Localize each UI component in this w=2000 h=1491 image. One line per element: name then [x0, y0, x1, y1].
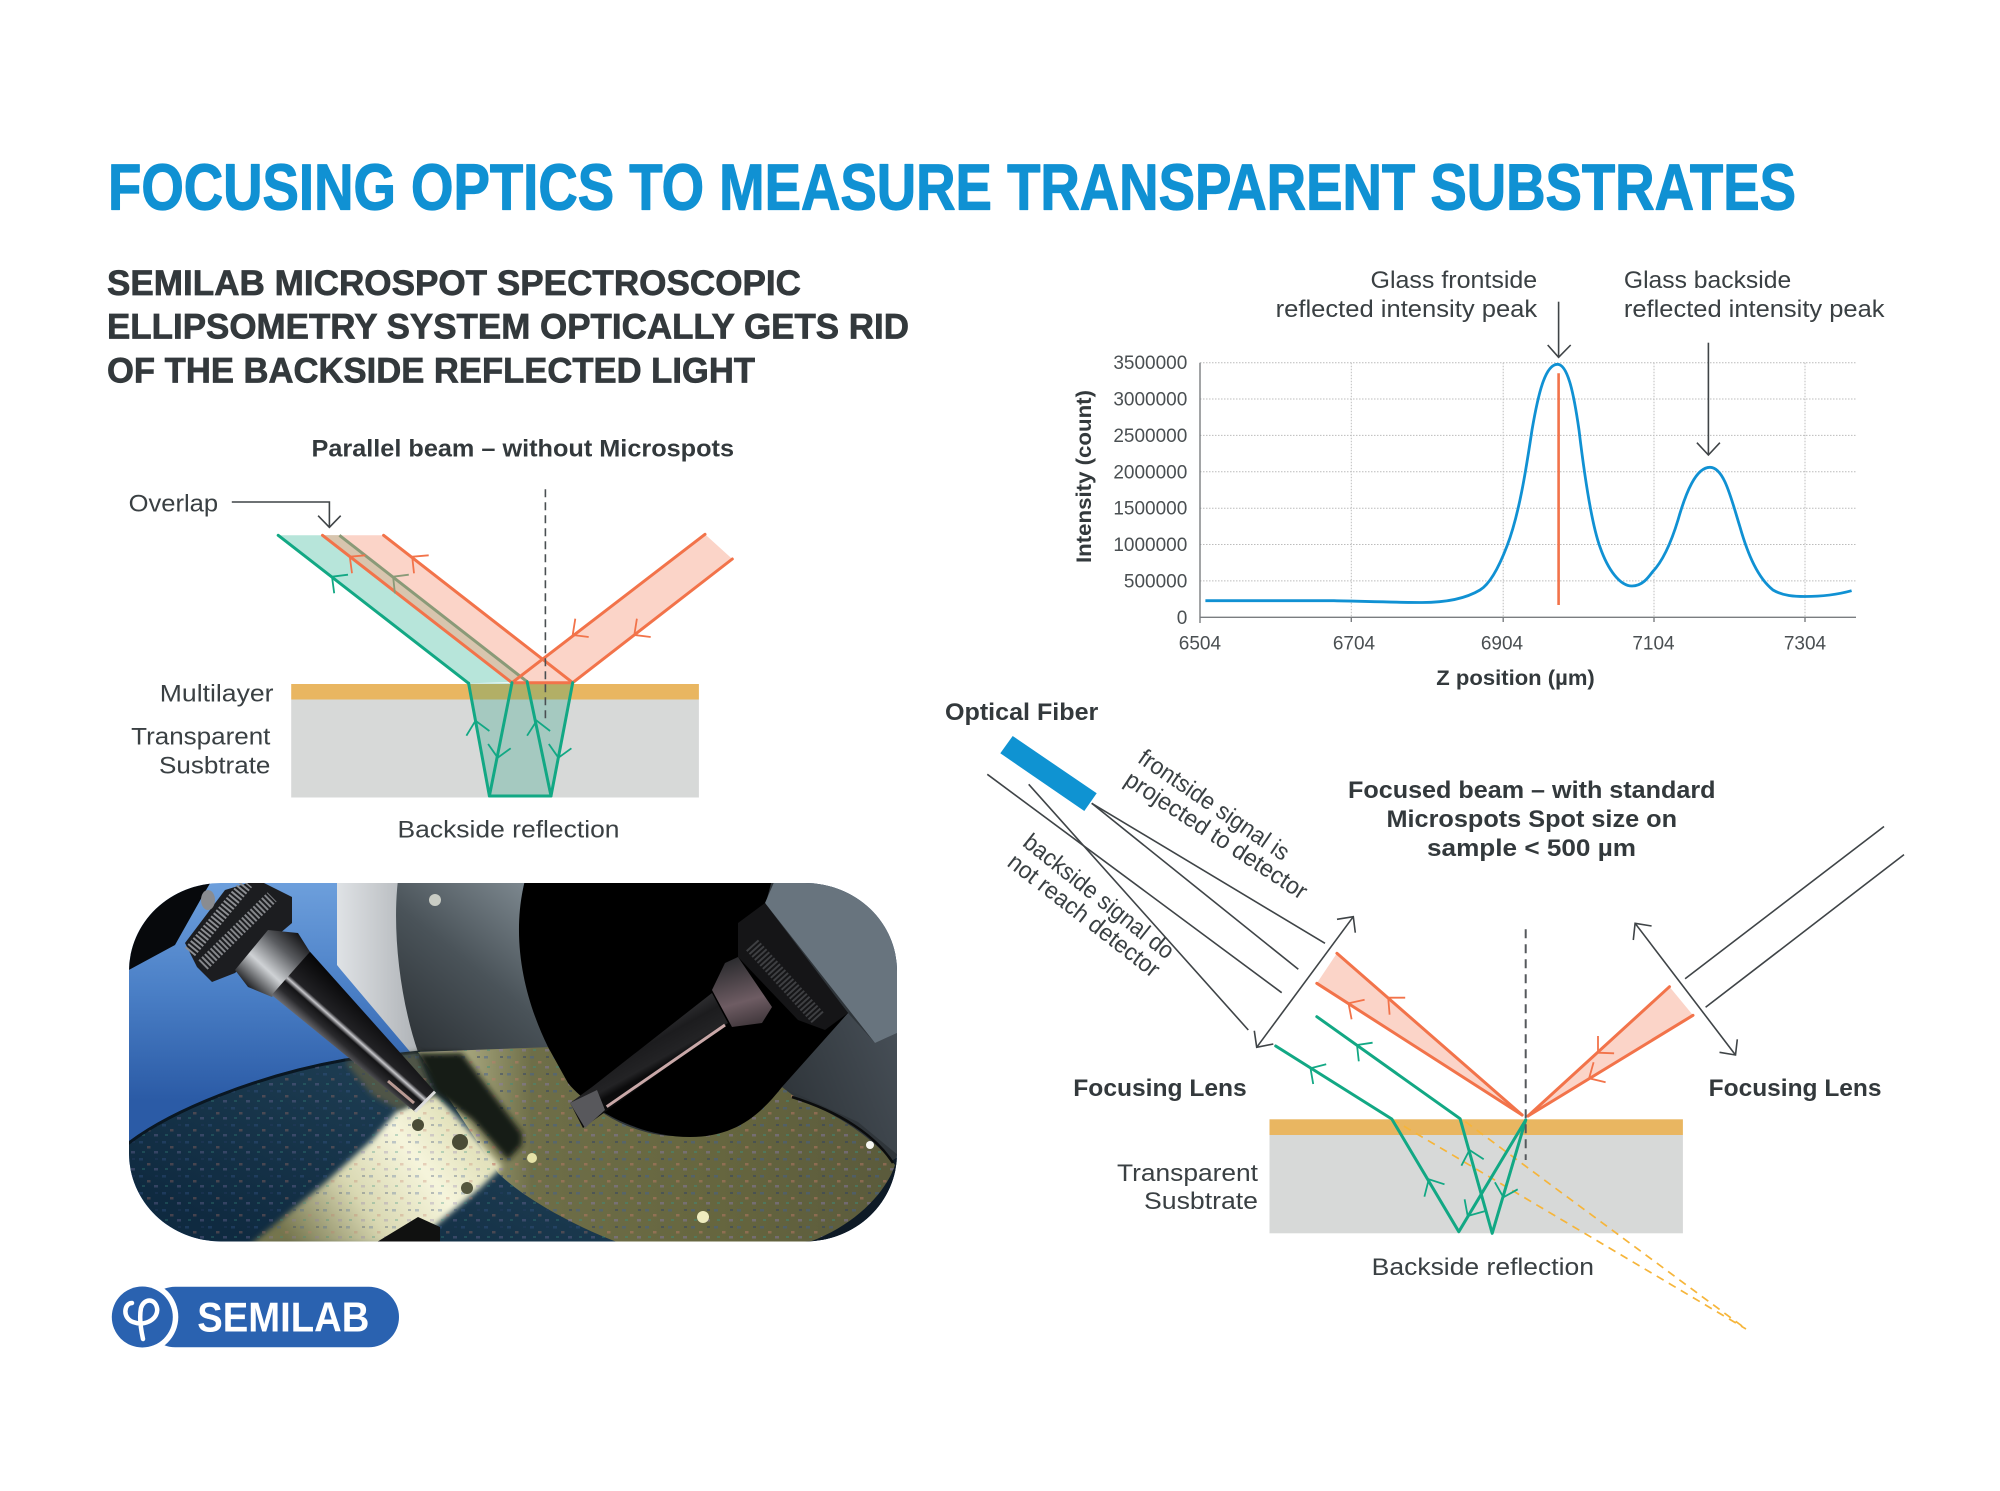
reflected green beam [278, 535, 527, 683]
x axis tick labels: 7104 [1632, 633, 1675, 654]
focused beam heading: Focused beam – with standard [1348, 777, 1716, 804]
substrate labels: Susbtrate [1144, 1188, 1258, 1215]
focusing lens labels [1073, 1075, 1882, 1102]
substrate labels: Transparent [1117, 1160, 1258, 1187]
y axis title: Intensity (count) [1073, 390, 1096, 563]
y axis tick labels: 2000000 [1113, 462, 1187, 483]
layer labels: Transparent [131, 723, 271, 750]
incoming parallel rays [1685, 826, 1904, 1007]
axes [1200, 363, 1856, 623]
incident beam [512, 534, 732, 683]
normal axis dashed line [544, 489, 546, 718]
beam edge lines [278, 534, 732, 796]
direction arrowheads [332, 555, 651, 758]
backside reflection label: Backside reflection [1372, 1254, 1594, 1281]
subtitle: SEMILAB MICROSPOT SPECTROSCOPIC [107, 264, 801, 303]
frontside signal note: projected to detector [1120, 766, 1312, 905]
x axis title: Z position (µm) [1436, 667, 1595, 690]
logo: Semilab [106, 1281, 399, 1353]
frontside signal note: frontside signal is [1133, 744, 1294, 866]
subtitle: OF THE BACKSIDE REFLECTED LIGHT [107, 352, 755, 390]
detector ray lines [987, 774, 1325, 1030]
frontside annotation: reflected intensity peak [1276, 296, 1538, 323]
focused beam heading: Microspots Spot size on [1386, 806, 1677, 833]
y axis tick labels [1113, 353, 1187, 629]
overlap label with leader arrow: Overlap [129, 491, 218, 518]
chart: intensity versus Z position [1073, 267, 1886, 690]
optical fiber label: Optical Fiber [945, 699, 1098, 726]
overlap band [322, 535, 527, 683]
frontside annotation [1276, 267, 1571, 357]
reflected focused beam [1317, 953, 1522, 1115]
layer labels [131, 681, 274, 779]
layer labels: Multilayer [160, 681, 274, 708]
y axis tick labels: 3500000 [1113, 353, 1187, 374]
focusing lens labels: Focusing Lens [1073, 1075, 1247, 1102]
x axis tick labels: 6904 [1481, 633, 1524, 654]
y axis tick labels: 500000 [1124, 571, 1187, 592]
normal axis dashed line [1525, 929, 1527, 1160]
logo: Semilab: SEMILAB [197, 1294, 369, 1341]
substrate labels [1117, 1160, 1258, 1215]
focusing lens labels: Focusing Lens [1709, 1075, 1882, 1102]
panel: parallel beam diagram [129, 436, 734, 843]
frontside annotation: Glass frontside [1370, 267, 1537, 294]
backside reflection label: Backside reflection [398, 816, 620, 843]
y axis tick labels: 3000000 [1113, 390, 1187, 410]
frontside peak marker [1557, 373, 1560, 605]
y axis tick labels: 1500000 [1113, 499, 1187, 520]
x axis tick labels: 6704 [1333, 633, 1376, 654]
backside signal note: backside signal do [1018, 829, 1179, 965]
subtitle [107, 264, 909, 390]
x axis tick labels: 6504 [1179, 633, 1221, 654]
backside annotation [1624, 267, 1886, 455]
yellow dashed backside paths [1392, 1119, 1746, 1329]
substrate layers [1270, 1119, 1683, 1233]
optical fiber [1000, 736, 1097, 811]
overlap label with leader arrow [129, 491, 341, 527]
heading: parallel beam: Parallel beam – without Microspots [312, 436, 734, 462]
substrate layers [291, 684, 699, 798]
left focusing lens arrow [1254, 917, 1355, 1047]
layer labels: Susbtrate [159, 752, 270, 779]
backside annotation: reflected intensity peak [1624, 296, 1886, 323]
y axis tick labels: 2500000 [1113, 426, 1187, 447]
x axis tick labels [1179, 633, 1827, 654]
panel: focused beam diagram [945, 699, 1904, 1329]
y axis tick labels: 0 [1177, 608, 1187, 629]
intensity curve [1205, 364, 1852, 602]
photo: ellipsometer optics above wafer [125, 880, 910, 1245]
backside annotation: Glass backside [1624, 267, 1791, 294]
reflected orange beam [322, 535, 573, 683]
beam in substrate [469, 683, 573, 796]
x axis tick labels: 7304 [1784, 633, 1827, 654]
green backside rays [1276, 1017, 1526, 1233]
gridlines [1200, 363, 1856, 617]
backside signal note: not reach detector [1002, 848, 1165, 983]
right focusing lens arrow [1633, 923, 1737, 1055]
focused beam heading: sample < 500 µm [1427, 835, 1636, 862]
subtitle: ELLIPSOMETRY SYSTEM OPTICALLY GETS RID [107, 308, 909, 346]
focused beam heading [1348, 777, 1716, 862]
incident focused beam [1528, 987, 1693, 1116]
y axis tick labels: 1000000 [1113, 535, 1187, 556]
